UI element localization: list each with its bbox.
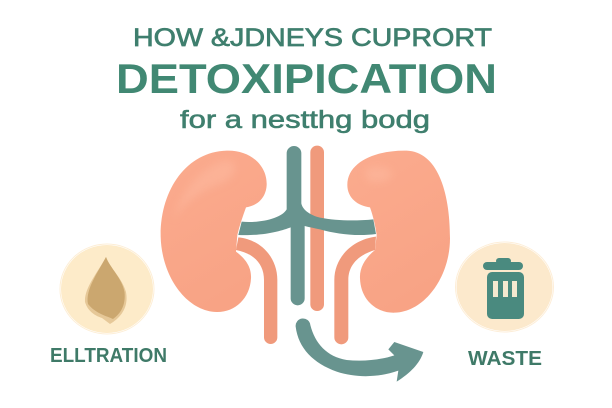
heading: detoxification: DETOXIPICATION	[116, 55, 497, 102]
icon: waste bin circle	[456, 242, 554, 332]
left kidney	[161, 151, 267, 312]
vessel: teal vertical and branches	[238, 146, 376, 305]
icon: filtration circle	[60, 244, 154, 334]
kidney highlights	[173, 160, 392, 220]
vessel: right orange vertical	[310, 146, 324, 311]
vessel: right ureter	[334, 237, 376, 344]
label: waste: WASTE	[468, 348, 542, 370]
right kidney	[347, 151, 450, 313]
kidney diagram	[161, 146, 450, 382]
subtitle: for a nestthg bodg	[180, 106, 430, 134]
label: filtration: ELLTRATION	[50, 345, 167, 367]
vessel: left ureter	[236, 237, 277, 344]
title line: how kidneys support: HOW &JDNEYS CUPRORT	[133, 24, 492, 52]
arrow to waste	[296, 318, 423, 382]
